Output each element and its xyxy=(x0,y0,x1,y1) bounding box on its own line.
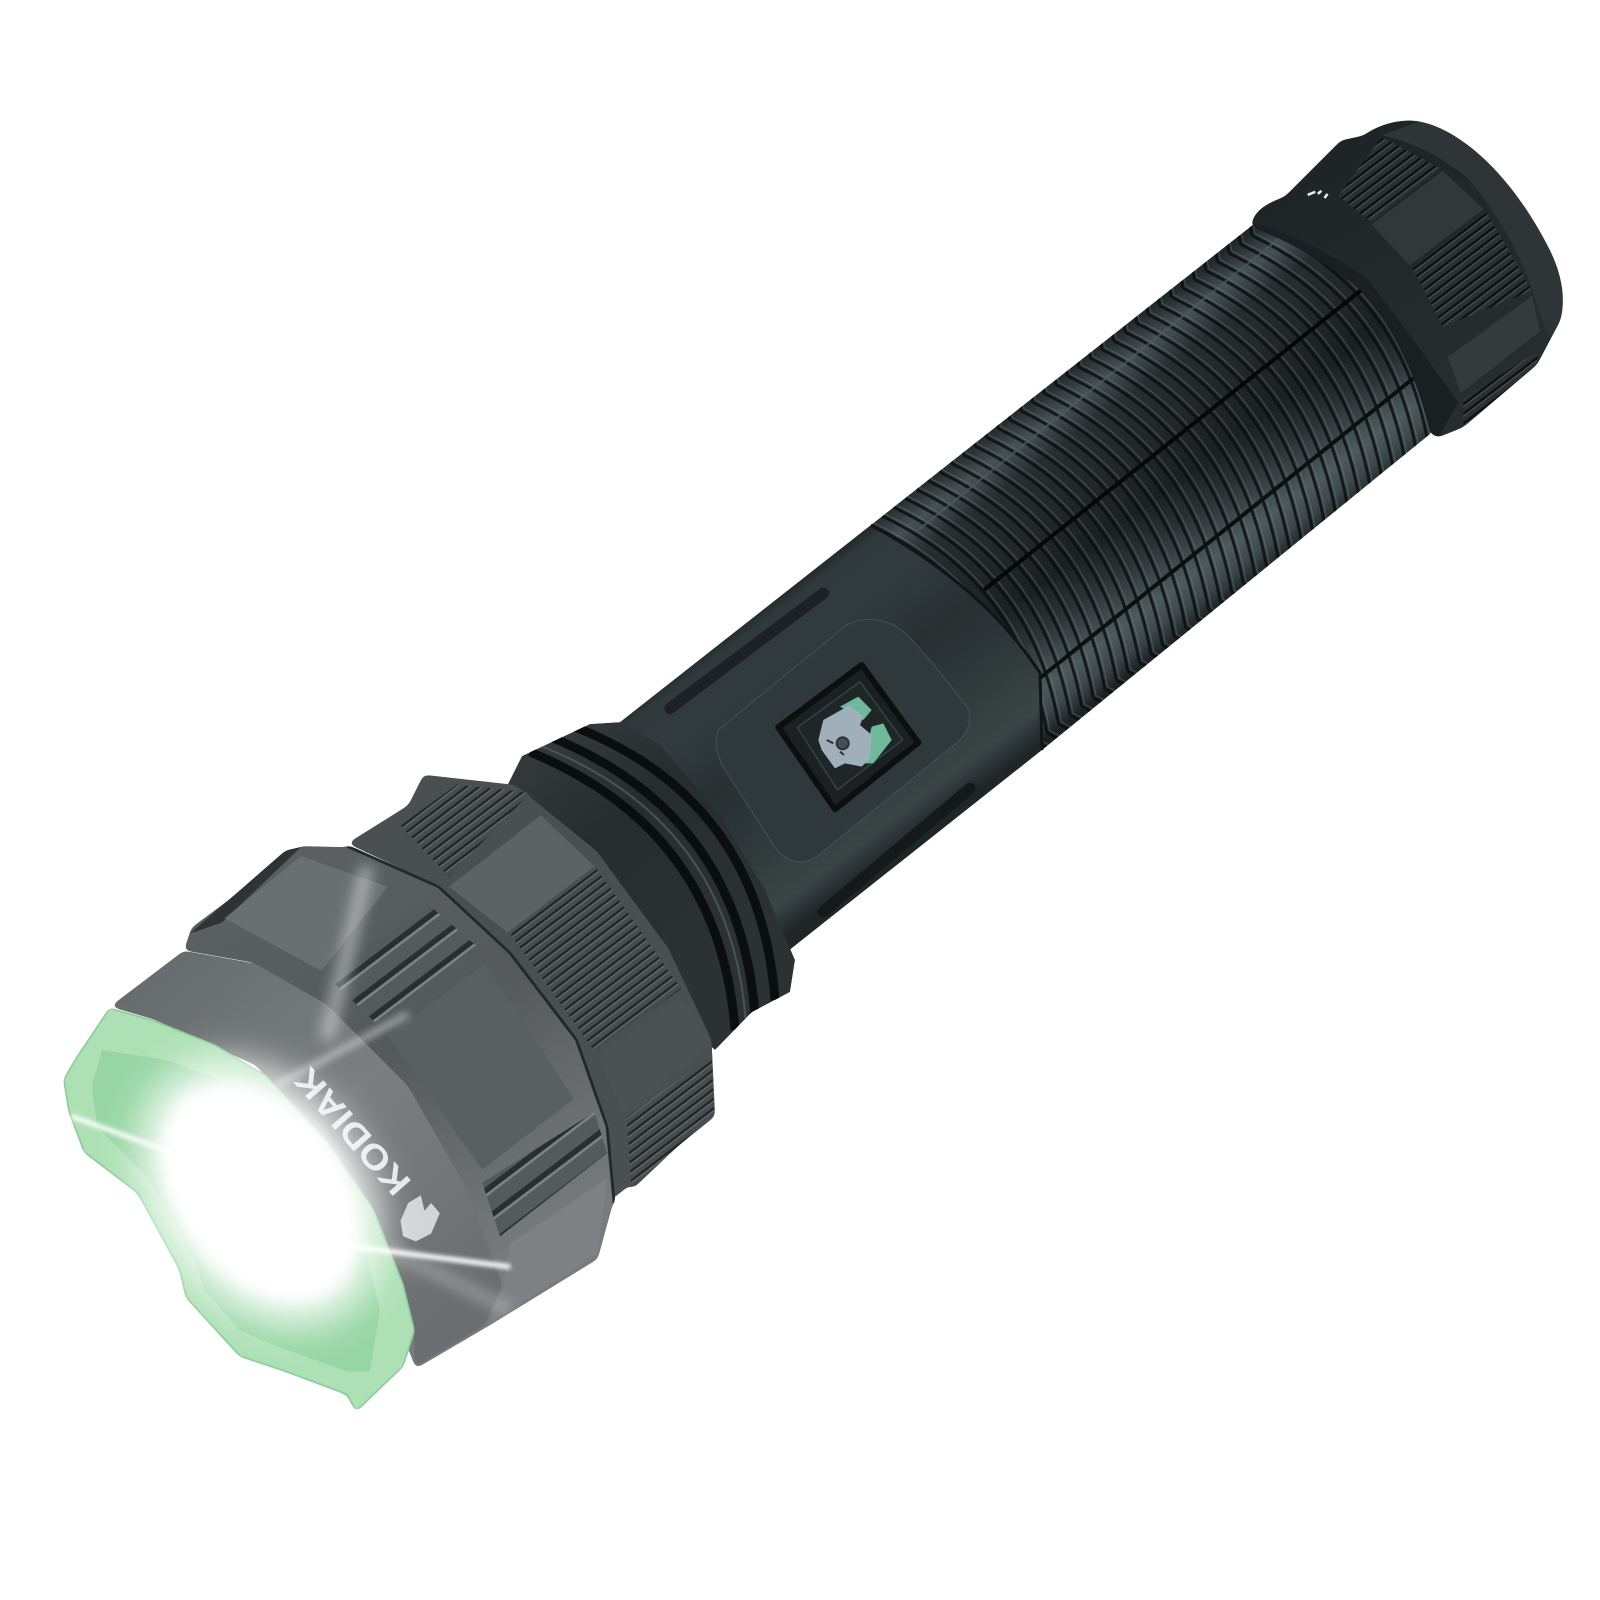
green lens rim xyxy=(64,1008,414,1411)
flashlight barrel: smooth body and switch xyxy=(610,525,1042,990)
logo bear head xyxy=(818,705,872,768)
ribbed grip section xyxy=(871,200,1480,750)
lower grip slot xyxy=(823,788,970,912)
separator ring line xyxy=(347,846,614,1203)
brand name: KODIAK xyxy=(287,1060,419,1202)
flare left xyxy=(71,1116,219,1170)
rear ring base xyxy=(347,774,715,1223)
seam to smooth body xyxy=(871,525,1042,750)
flare rim xyxy=(276,1014,408,1086)
small highlights xyxy=(1308,191,1328,198)
brand bear logo xyxy=(401,1195,440,1241)
tail cap silhouette xyxy=(1252,120,1563,438)
groove block 2 xyxy=(482,1112,607,1236)
grip ribs xyxy=(871,200,1480,750)
flare upper xyxy=(327,866,367,1040)
central grip slot xyxy=(984,288,1364,590)
collar groove 1 xyxy=(530,752,735,1030)
top grip notch xyxy=(190,847,301,934)
front bevel xyxy=(110,951,503,1367)
lens glow halo xyxy=(84,1009,437,1377)
front faceted ring xyxy=(184,846,614,1369)
lens glow core xyxy=(119,1044,401,1341)
collar band xyxy=(1252,222,1458,438)
rubber switch pad xyxy=(716,620,970,862)
knurled patch lower xyxy=(1463,352,1537,426)
smooth body section xyxy=(610,525,1042,990)
power button xyxy=(778,665,918,809)
knurled patch middle xyxy=(1412,212,1532,327)
threaded collar xyxy=(500,722,795,1050)
flashlight head xyxy=(64,774,715,1411)
grip base xyxy=(871,200,1480,750)
rear knurl patch 1 xyxy=(401,785,531,877)
knurled patch upper xyxy=(1338,137,1440,222)
green lens interior xyxy=(92,1050,380,1371)
collar base xyxy=(500,722,795,1050)
middle flat facet xyxy=(388,963,574,1170)
upper ridge line xyxy=(917,232,1287,531)
switch area xyxy=(670,593,970,912)
flat facet lower xyxy=(1448,296,1540,393)
button inner frame xyxy=(797,682,903,790)
front ring base xyxy=(184,846,613,1369)
button outer frame xyxy=(778,665,918,809)
rear flat facet xyxy=(449,815,594,933)
rear flat facet 2 xyxy=(597,996,712,1114)
upper grip slot xyxy=(670,593,823,708)
collar groove 2 xyxy=(553,738,755,1015)
flat facet upper xyxy=(1371,171,1484,265)
end rim xyxy=(1382,121,1563,339)
rear knurl patch 2 xyxy=(510,869,681,1051)
flare right xyxy=(332,1244,510,1267)
tail cap xyxy=(1252,120,1563,438)
collar highlight xyxy=(541,746,746,1024)
light flares xyxy=(71,866,510,1310)
rear knurl patch 3 xyxy=(627,1056,714,1190)
lower flat facet xyxy=(487,1179,607,1326)
groove block 1 xyxy=(327,905,485,1030)
bear logo on button xyxy=(818,697,892,768)
product illustration: flashlight xyxy=(64,120,1563,1410)
rear knurled ring xyxy=(347,774,715,1223)
lower ridge line xyxy=(1040,373,1420,678)
top flat facet xyxy=(224,856,388,971)
logo bear face xyxy=(827,737,849,755)
flare lower rim xyxy=(388,1249,510,1310)
collar groove 3 xyxy=(575,727,775,1000)
logo green paws xyxy=(840,697,892,763)
